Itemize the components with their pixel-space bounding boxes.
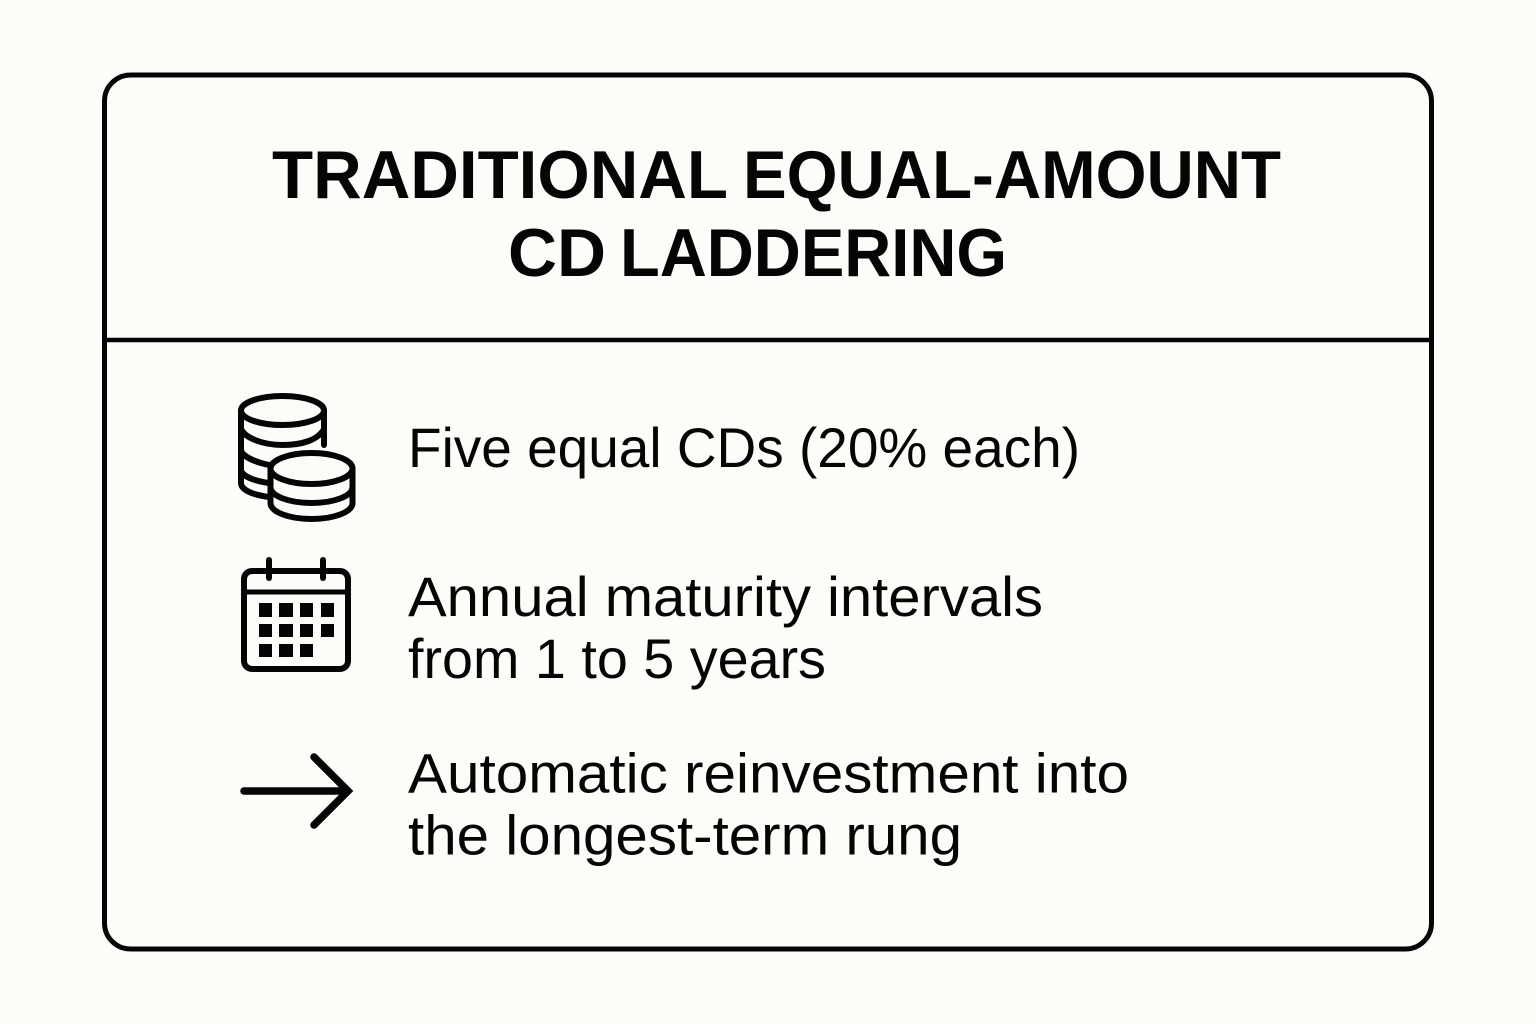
panel: card frame [104,75,1432,949]
title: EQUAL-AMOUNT [743,137,1281,213]
title: LADDERING [620,215,1007,291]
title: CD [508,215,606,291]
icon: arrow [244,757,348,825]
title: TRADITIONAL [272,137,728,213]
text: annual maturity intervals: from 1 to 5 years [408,627,826,690]
text: five equal CDs: Five equal CDs (20% each) [408,416,1080,479]
title [272,137,1281,291]
text: automatic reinvestment [408,742,1129,866]
text: annual maturity intervals [408,565,1043,690]
text: automatic reinvestment: Automatic reinvestment into [408,742,1129,804]
icon: coin stacks [241,396,352,519]
text: annual maturity intervals: Annual maturity intervals [408,565,1043,628]
icon: calendar [244,560,348,669]
text: automatic reinvestment: the longest-term rung [408,804,962,866]
